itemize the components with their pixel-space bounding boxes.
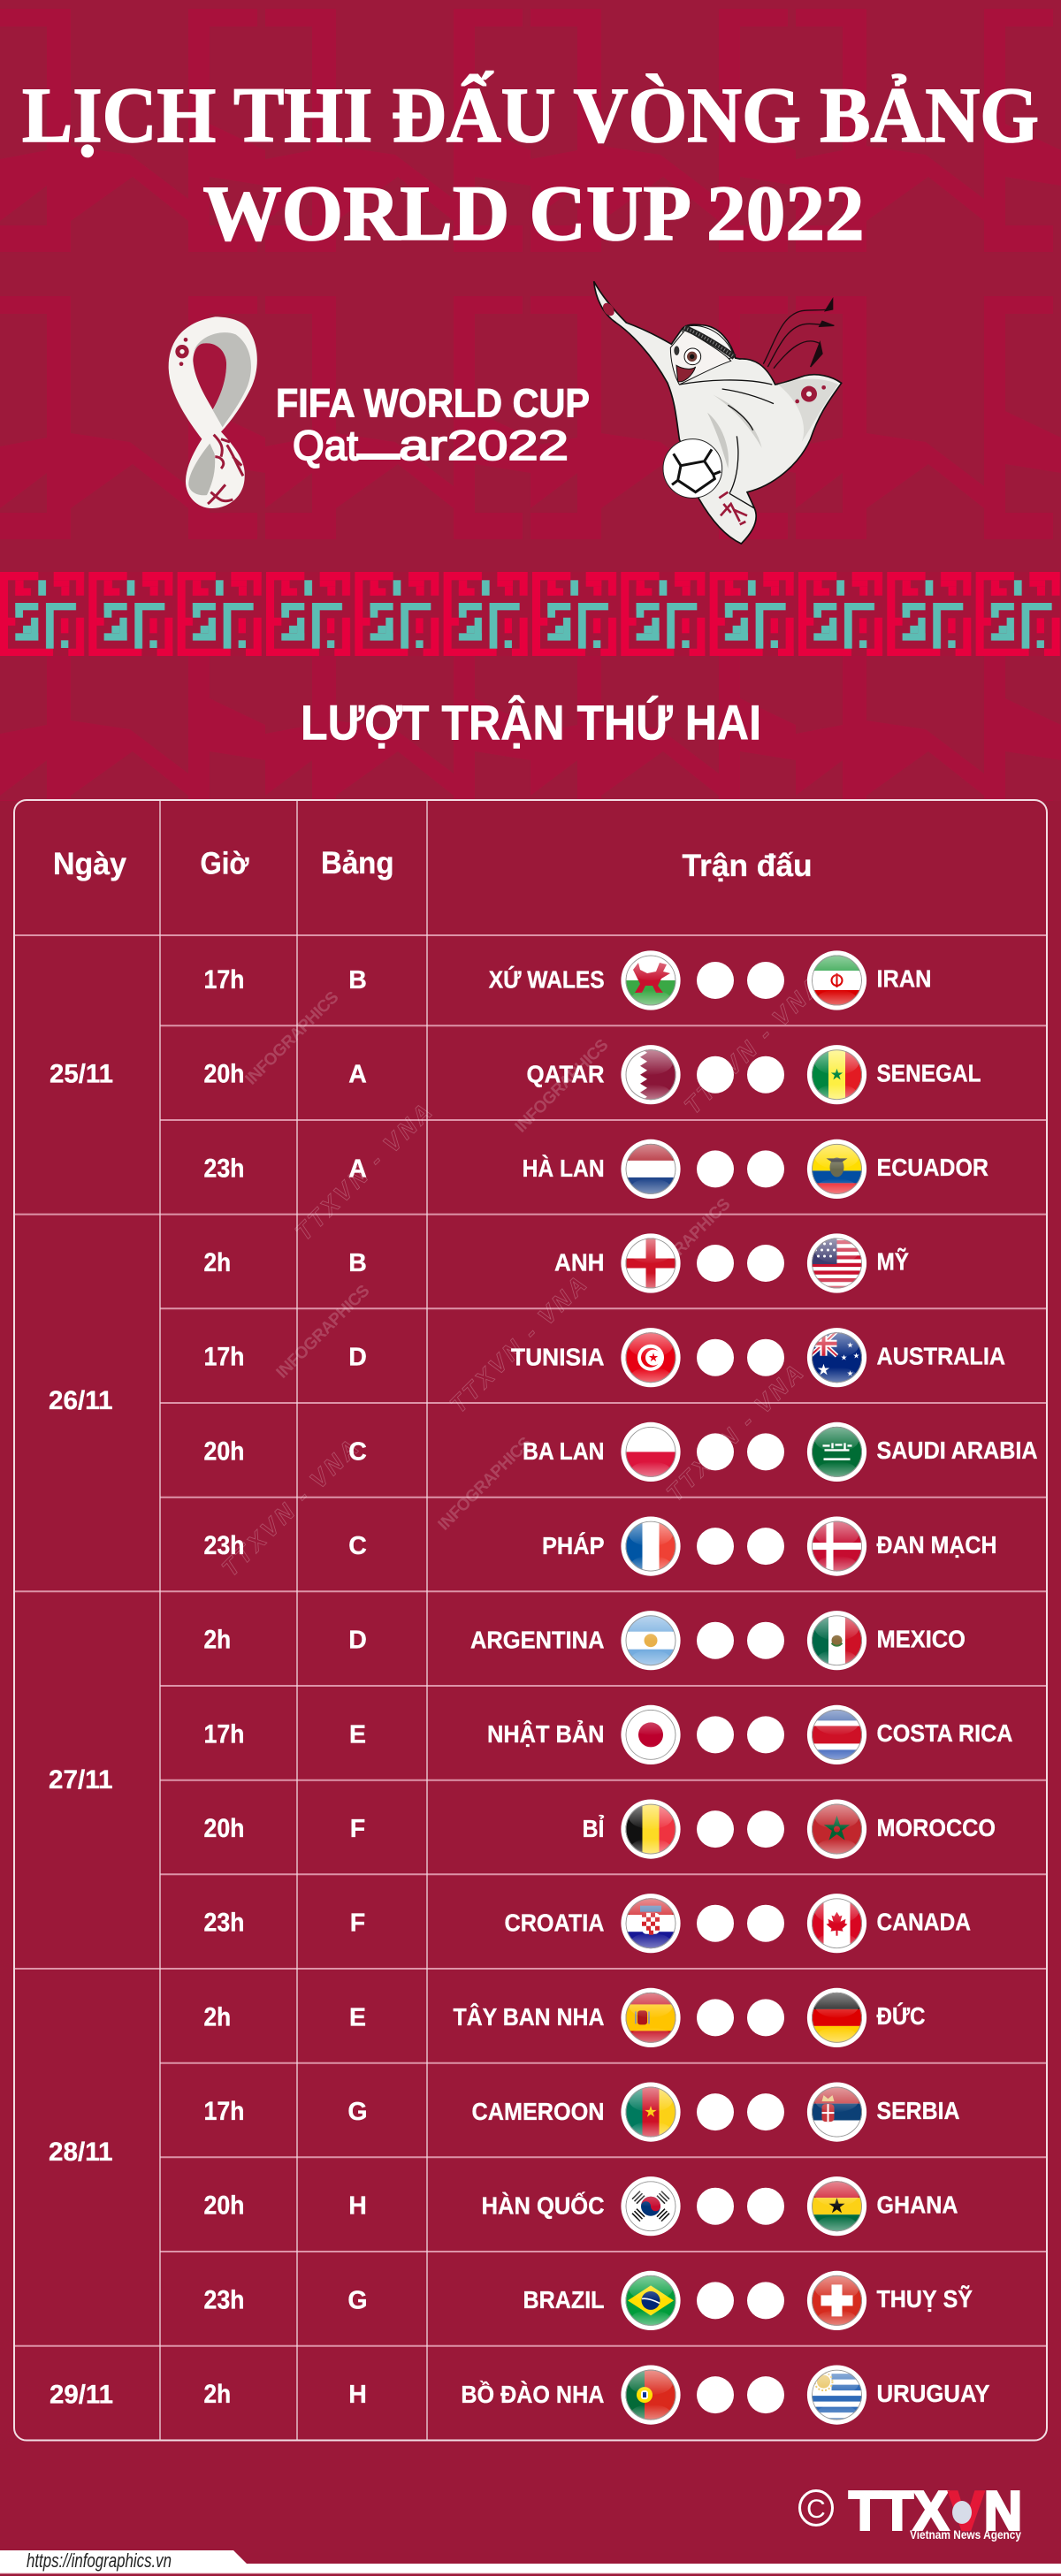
match row: Pháp - Đan Mạch	[203, 1517, 997, 1576]
match row: Cameroon - Serbia	[203, 2083, 960, 2142]
TTXVN logo: TTXVN	[849, 2481, 1022, 2542]
icon: flag of Tunisia	[621, 1328, 681, 1387]
match row: Brazil - Thuỵ Sỹ: G	[347, 2286, 368, 2314]
match row: Xứ Wales - Iran	[203, 950, 932, 1010]
match row: Pháp - Đan Mạch: C	[348, 1532, 367, 1560]
icon: flag of Switzerland	[807, 2271, 866, 2330]
match row: Ba Lan - Saudi Arabia: 20h	[203, 1437, 244, 1466]
table header: Giờ	[200, 847, 249, 881]
icon: flag of Croatia	[621, 1894, 681, 1953]
match row: Pháp - Đan Mạch: PHÁP	[542, 1532, 605, 1559]
match row: Nhật Bản - Costa Rica: NHẬT BẢN	[487, 1719, 605, 1748]
icon: flag of Wales	[621, 950, 681, 1010]
match row: Brazil - Thuỵ Sỹ: BRAZIL	[523, 2286, 605, 2313]
match row: Hàn Quốc - Ghana: 20h	[203, 2191, 244, 2221]
match row: Qatar - Senegal: A	[348, 1061, 367, 1089]
icon: flag of Belgium	[621, 1800, 681, 1859]
match row: Tây Ban Nha - Đức: TÂY BAN NHA	[453, 2003, 605, 2031]
match row: Ba Lan - Saudi Arabia	[203, 1422, 1038, 1482]
match row: Bỉ - Morocco: F	[350, 1815, 365, 1843]
FIFA World Cup wordmark	[276, 380, 590, 469]
match row: Cameroon - Serbia: CAMEROON	[472, 2098, 605, 2125]
match row: Brazil - Thuỵ Sỹ	[203, 2271, 973, 2330]
FIFA World Cup wordmark: ar2022	[399, 422, 569, 469]
match row: Brazil - Thuỵ Sỹ: THUỴ SỸ	[877, 2285, 973, 2313]
match row: Cameroon - Serbia: 17h	[203, 2097, 244, 2126]
icon: FIFA World Cup emblem	[169, 316, 257, 508]
icon: flag of Morocco	[807, 1800, 866, 1859]
match row: Hà Lan - Ecuador	[203, 1139, 988, 1199]
FIFA World Cup wordmark: FIFA WORLD CUP	[276, 380, 590, 426]
watermarks: TTXVN - VNA	[445, 1271, 592, 1418]
match row: Hàn Quốc - Ghana	[203, 2176, 958, 2236]
watermarks: INFOGRAPHICS	[273, 1282, 374, 1383]
icon: flag of Costa Rica	[807, 1705, 866, 1764]
match row: Bồ Đào Nha - Uruguay: 2h	[203, 2380, 231, 2409]
icon: flag of Denmark	[807, 1517, 866, 1576]
match row: Croatia - Canada: CROATIA	[504, 1909, 605, 1936]
dates column: 28/11	[49, 2138, 113, 2167]
icon: flag of Spain	[621, 1988, 681, 2047]
match row: Qatar - Senegal: SENEGAL	[877, 1059, 981, 1086]
match row: Tây Ban Nha - Đức: ĐỨC	[877, 2002, 925, 2030]
icon: flag of Japan	[621, 1705, 681, 1764]
match row: Nhật Bản - Costa Rica: E	[349, 1720, 366, 1749]
watermarks: TTXVN - VNA	[290, 1099, 437, 1246]
match row: Anh - Mỹ: B	[348, 1249, 367, 1277]
title	[22, 72, 1039, 257]
match row: Xứ Wales - Iran: XỨ WALES	[489, 966, 605, 994]
match row: Bỉ - Morocco: BỈ	[582, 1814, 605, 1842]
icon: flag of Canada	[807, 1894, 866, 1953]
icon: flag of Brazil	[621, 2271, 681, 2330]
match row: Nhật Bản - Costa Rica: 17h	[203, 1719, 244, 1749]
match row: Cameroon - Serbia: SERBIA	[877, 2097, 960, 2124]
icon: flag of South Korea	[621, 2176, 681, 2236]
icon: flag of Australia	[807, 1328, 866, 1387]
icon: flag of Ghana	[807, 2176, 866, 2236]
match row: Qatar - Senegal: QATAR	[527, 1060, 605, 1087]
dates column: 26/11	[49, 1386, 113, 1415]
icon: flag of Qatar	[621, 1045, 681, 1104]
match row: Brazil - Thuỵ Sỹ: 23h	[203, 2285, 244, 2314]
match row: Hàn Quốc - Ghana: GHANA	[877, 2191, 958, 2218]
match row: Hà Lan - Ecuador: ECUADOR	[877, 1154, 988, 1181]
match row: Qatar - Senegal	[203, 1045, 981, 1104]
table panel	[14, 800, 1047, 2440]
watermarks	[217, 972, 826, 1581]
mascot tassels	[763, 299, 834, 369]
match row: Qatar - Senegal: 20h	[203, 1060, 244, 1089]
match row: Tunisia - Australia	[203, 1328, 1005, 1387]
footer strip with website tab	[0, 2549, 1061, 2574]
match row: Tây Ban Nha - Đức: 2h	[203, 2002, 231, 2031]
match row: Xứ Wales - Iran: B	[348, 966, 367, 995]
watermarks: INFOGRAPHICS	[435, 1434, 536, 1535]
table header	[53, 846, 812, 883]
footer strip with website tab: https://infographics.vn	[27, 2549, 172, 2572]
match row: Bồ Đào Nha - Uruguay: BỒ ĐÀO NHA	[461, 2381, 604, 2408]
match row: Bồ Đào Nha - Uruguay: URUGUAY	[877, 2380, 990, 2407]
match row: Nhật Bản - Costa Rica: COSTA RICA	[877, 1719, 1013, 1747]
icon: flag of Mexico	[807, 1611, 866, 1670]
dates column: 29/11	[50, 2381, 113, 2410]
match row: Nhật Bản - Costa Rica	[203, 1705, 1013, 1764]
match row: Pháp - Đan Mạch: ĐAN MẠCH	[877, 1531, 997, 1559]
match row: Bồ Đào Nha - Uruguay: H	[348, 2381, 367, 2409]
match row: Tunisia - Australia: TUNISIA	[511, 1343, 605, 1370]
dates column: 27/11	[49, 1765, 113, 1795]
watermarks: INFOGRAPHICS	[512, 1036, 613, 1137]
match row: Xứ Wales - Iran: 17h	[203, 965, 244, 995]
match row: Anh - Mỹ: 2h	[203, 1248, 231, 1277]
copyright symbol: C	[806, 2495, 826, 2524]
icon: flag of England	[621, 1233, 681, 1293]
match row: Argentina - Mexico	[203, 1611, 966, 1670]
decorative band	[0, 572, 1061, 656]
mascot body	[594, 281, 842, 544]
subtitle: LƯỢT TRẬN THỨ HAI	[301, 695, 761, 751]
TTXVN logo: Vietnam News Agency	[910, 2527, 1021, 2542]
match row: Argentina - Mexico: MEXICO	[877, 1625, 966, 1652]
title: WORLD CUP 2022	[203, 171, 865, 257]
table header: Bảng	[321, 846, 394, 880]
match row: Anh - Mỹ	[203, 1233, 909, 1293]
icon: flag of Poland	[621, 1422, 681, 1482]
watermarks: INFOGRAPHICS	[634, 1195, 735, 1296]
icon: flag of Senegal	[807, 1045, 866, 1104]
table header: Ngày	[53, 847, 127, 881]
icon: flag of Ecuador	[807, 1139, 866, 1199]
match row: Tunisia - Australia: 17h	[203, 1343, 244, 1372]
mascot decorations	[600, 301, 826, 403]
watermarks: TTXVN - VNA	[679, 972, 826, 1119]
mascot head	[683, 325, 735, 361]
match row: Cameroon - Serbia: G	[347, 2098, 368, 2126]
icon: flag of USA	[807, 1233, 866, 1293]
icon: flag of Saudi Arabia	[807, 1422, 866, 1482]
icon: flag of Argentina	[621, 1611, 681, 1670]
copyright symbol	[799, 2491, 833, 2525]
watermarks: TTXVN - VNA	[661, 1360, 808, 1506]
match row: Ba Lan - Saudi Arabia: SAUDI ARABIA	[877, 1437, 1038, 1464]
table header: Trận đấu	[683, 849, 812, 883]
match row: Hàn Quốc - Ghana: H	[348, 2192, 367, 2221]
match row: Croatia - Canada	[203, 1894, 971, 1953]
match row: Croatia - Canada: F	[350, 1909, 365, 1938]
match row: Ba Lan - Saudi Arabia: BA LAN	[523, 1437, 605, 1465]
watermarks: INFOGRAPHICS	[242, 988, 343, 1089]
match row: Bỉ - Morocco: 20h	[203, 1814, 244, 1843]
icon: flag of Netherlands	[621, 1139, 681, 1199]
match row: Hà Lan - Ecuador: HÀ LAN	[523, 1155, 605, 1182]
icon: flag of Portugal	[621, 2366, 681, 2425]
icon: flag of France	[621, 1517, 681, 1576]
match row: Xứ Wales - Iran: IRAN	[877, 965, 932, 993]
FIFA World Cup wordmark: Qat	[293, 422, 358, 469]
icon: flag of Serbia	[807, 2083, 866, 2142]
match row: Bồ Đào Nha - Uruguay	[203, 2366, 990, 2425]
icon: flag of Uruguay	[807, 2366, 866, 2425]
icon: flag of Cameroon	[621, 2083, 681, 2142]
match row: Anh - Mỹ: ANH	[554, 1249, 605, 1277]
match row: Anh - Mỹ: MỸ	[877, 1248, 909, 1276]
match row: Tunisia - Australia: D	[348, 1344, 367, 1372]
match row: Argentina - Mexico: D	[348, 1627, 367, 1655]
match row: Tây Ban Nha - Đức: E	[349, 2003, 366, 2031]
match row: Hà Lan - Ecuador: A	[348, 1155, 367, 1183]
dates column: 25/11	[50, 1059, 113, 1088]
match row: Hà Lan - Ecuador: 23h	[203, 1154, 244, 1183]
mascot ball	[663, 439, 722, 498]
icon: flag of Germany	[807, 1988, 866, 2047]
match row: Hàn Quốc - Ghana: HÀN QUỐC	[482, 2191, 605, 2219]
icon: La'eeb mascot	[594, 281, 842, 544]
title: LỊCH THI ĐẤU VÒNG BẢNG	[22, 72, 1039, 159]
match row: Croatia - Canada: CANADA	[877, 1908, 971, 1935]
match row: Bỉ - Morocco	[203, 1800, 996, 1859]
match row: Bỉ - Morocco: MOROCCO	[877, 1814, 996, 1841]
watermarks: TTXVN - VNA	[217, 1435, 363, 1581]
dates column	[49, 1059, 113, 2410]
match row: Pháp - Đan Mạch: 23h	[203, 1531, 244, 1560]
match row: Ba Lan - Saudi Arabia: C	[348, 1437, 367, 1466]
match row: Tunisia - Australia: AUSTRALIA	[877, 1342, 1005, 1369]
match row: Croatia - Canada: 23h	[203, 1909, 244, 1938]
match row: Argentina - Mexico: 2h	[203, 1626, 231, 1655]
match row: Argentina - Mexico: ARGENTINA	[470, 1626, 605, 1653]
icon: flag of Iran	[807, 950, 866, 1010]
match row: Tây Ban Nha - Đức	[203, 1988, 925, 2047]
